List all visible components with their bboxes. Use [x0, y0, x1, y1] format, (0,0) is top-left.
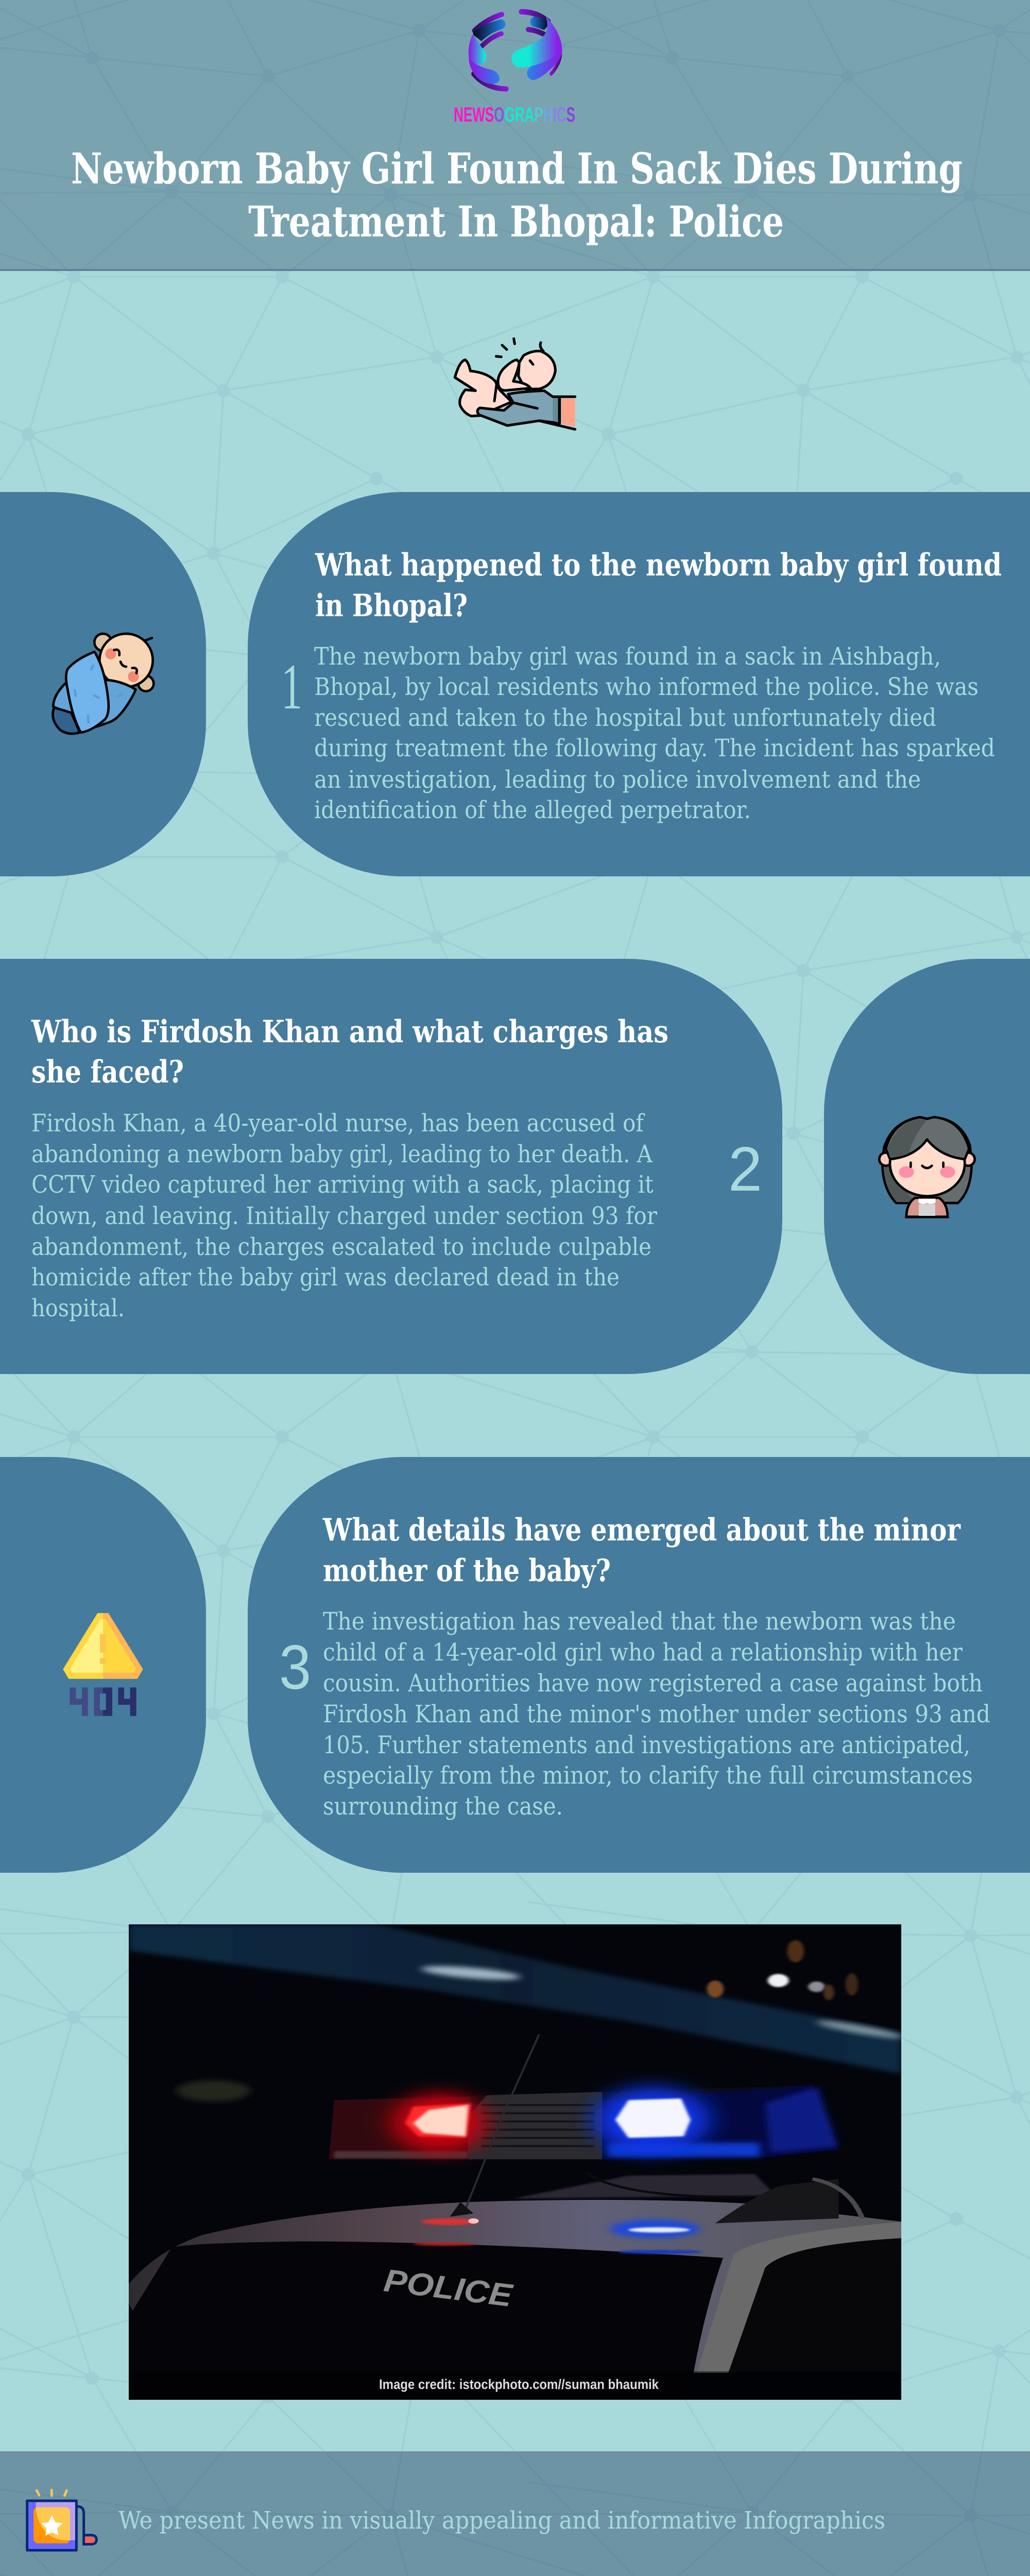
body text 2: homicide after the baby girl was declared dead in the: [31, 1263, 620, 1292]
body text 2: hospital.: [31, 1294, 125, 1323]
panel 3: warning pill: [0, 1457, 206, 1873]
heading 3: mother of the baby?: [323, 1553, 611, 1589]
heading 1: in Bhopal?: [315, 588, 468, 624]
panel 1: question card: [248, 492, 1030, 876]
heading 2: [31, 1014, 668, 1090]
body text 2: CCTV video captured her arriving with a sack, placing it: [31, 1171, 654, 1199]
panel 2: woman pill: [824, 959, 1030, 1374]
icon: star mug: [27, 2490, 96, 2550]
logo wordmark: NEWSOGRAPHICS: [454, 104, 575, 126]
body text 2: Firdosh Khan, a 40-year-old nurse, has been accused of: [31, 1109, 645, 1138]
title: [71, 144, 963, 247]
number 3: 3: [279, 1632, 311, 1702]
number 1: 1: [281, 651, 302, 723]
heading 2: she faced?: [31, 1054, 184, 1090]
panel 2: question card: [0, 959, 782, 1374]
icon: woman nurse: [879, 1117, 975, 1217]
logo symbol: [469, 12, 562, 89]
header band: [0, 0, 1030, 271]
top logo: [454, 12, 575, 126]
body text 3: The investigation has revealed that the newborn was the: [323, 1607, 956, 1636]
body text 3: [323, 1607, 990, 1821]
police lettering: POLICE: [382, 2263, 515, 2314]
body text 3: surrounding the case.: [323, 1792, 563, 1821]
panel 3: question card: [248, 1457, 1030, 1873]
panel 1: baby pill: [0, 492, 206, 876]
heading 1: [315, 547, 1002, 624]
body text 1: The newborn baby girl was found in a sack in Aishbagh,: [314, 642, 941, 671]
heading 3: [322, 1512, 961, 1589]
body text 1: an investigation, leading to police involvement and the: [314, 766, 921, 794]
image credit: Image credit: istockphoto.com//suman bhaumik: [379, 2377, 659, 2392]
body text 3: child of a 14-year-old girl who had a relationship with her: [323, 1638, 963, 1667]
title: Treatment In Bhopal: Police: [248, 197, 784, 247]
body text 1: rescued and taken to the hospital but unfortunately died: [314, 704, 936, 732]
body text 2: abandonment, the charges escalated to include culpable: [31, 1233, 651, 1261]
tagline band: [0, 2451, 1030, 2576]
heading 2: Who is Firdosh Khan and what charges has: [31, 1014, 668, 1050]
tagline text: We present News in visually appealing and informative Infographics: [118, 2506, 885, 2535]
icon: 404 warning: [63, 1613, 143, 1716]
body text 1: identification of the alleged perpetrator.: [314, 796, 751, 824]
body text 1: [314, 642, 995, 824]
icon: swaddled baby: [53, 634, 153, 734]
photo: police car at night: [129, 1924, 904, 2400]
body text 3: especially from the minor, to clarify the full circumstances: [323, 1761, 973, 1790]
body text 2: abandoning a newborn baby girl, leading to her death. A: [31, 1140, 653, 1168]
number 2: 2: [728, 1134, 762, 1204]
body text 2: down, and leaving. Initially charged under section 93 for: [31, 1202, 657, 1230]
body text 2: [31, 1109, 657, 1323]
icon: baby held in hand: [455, 338, 575, 429]
